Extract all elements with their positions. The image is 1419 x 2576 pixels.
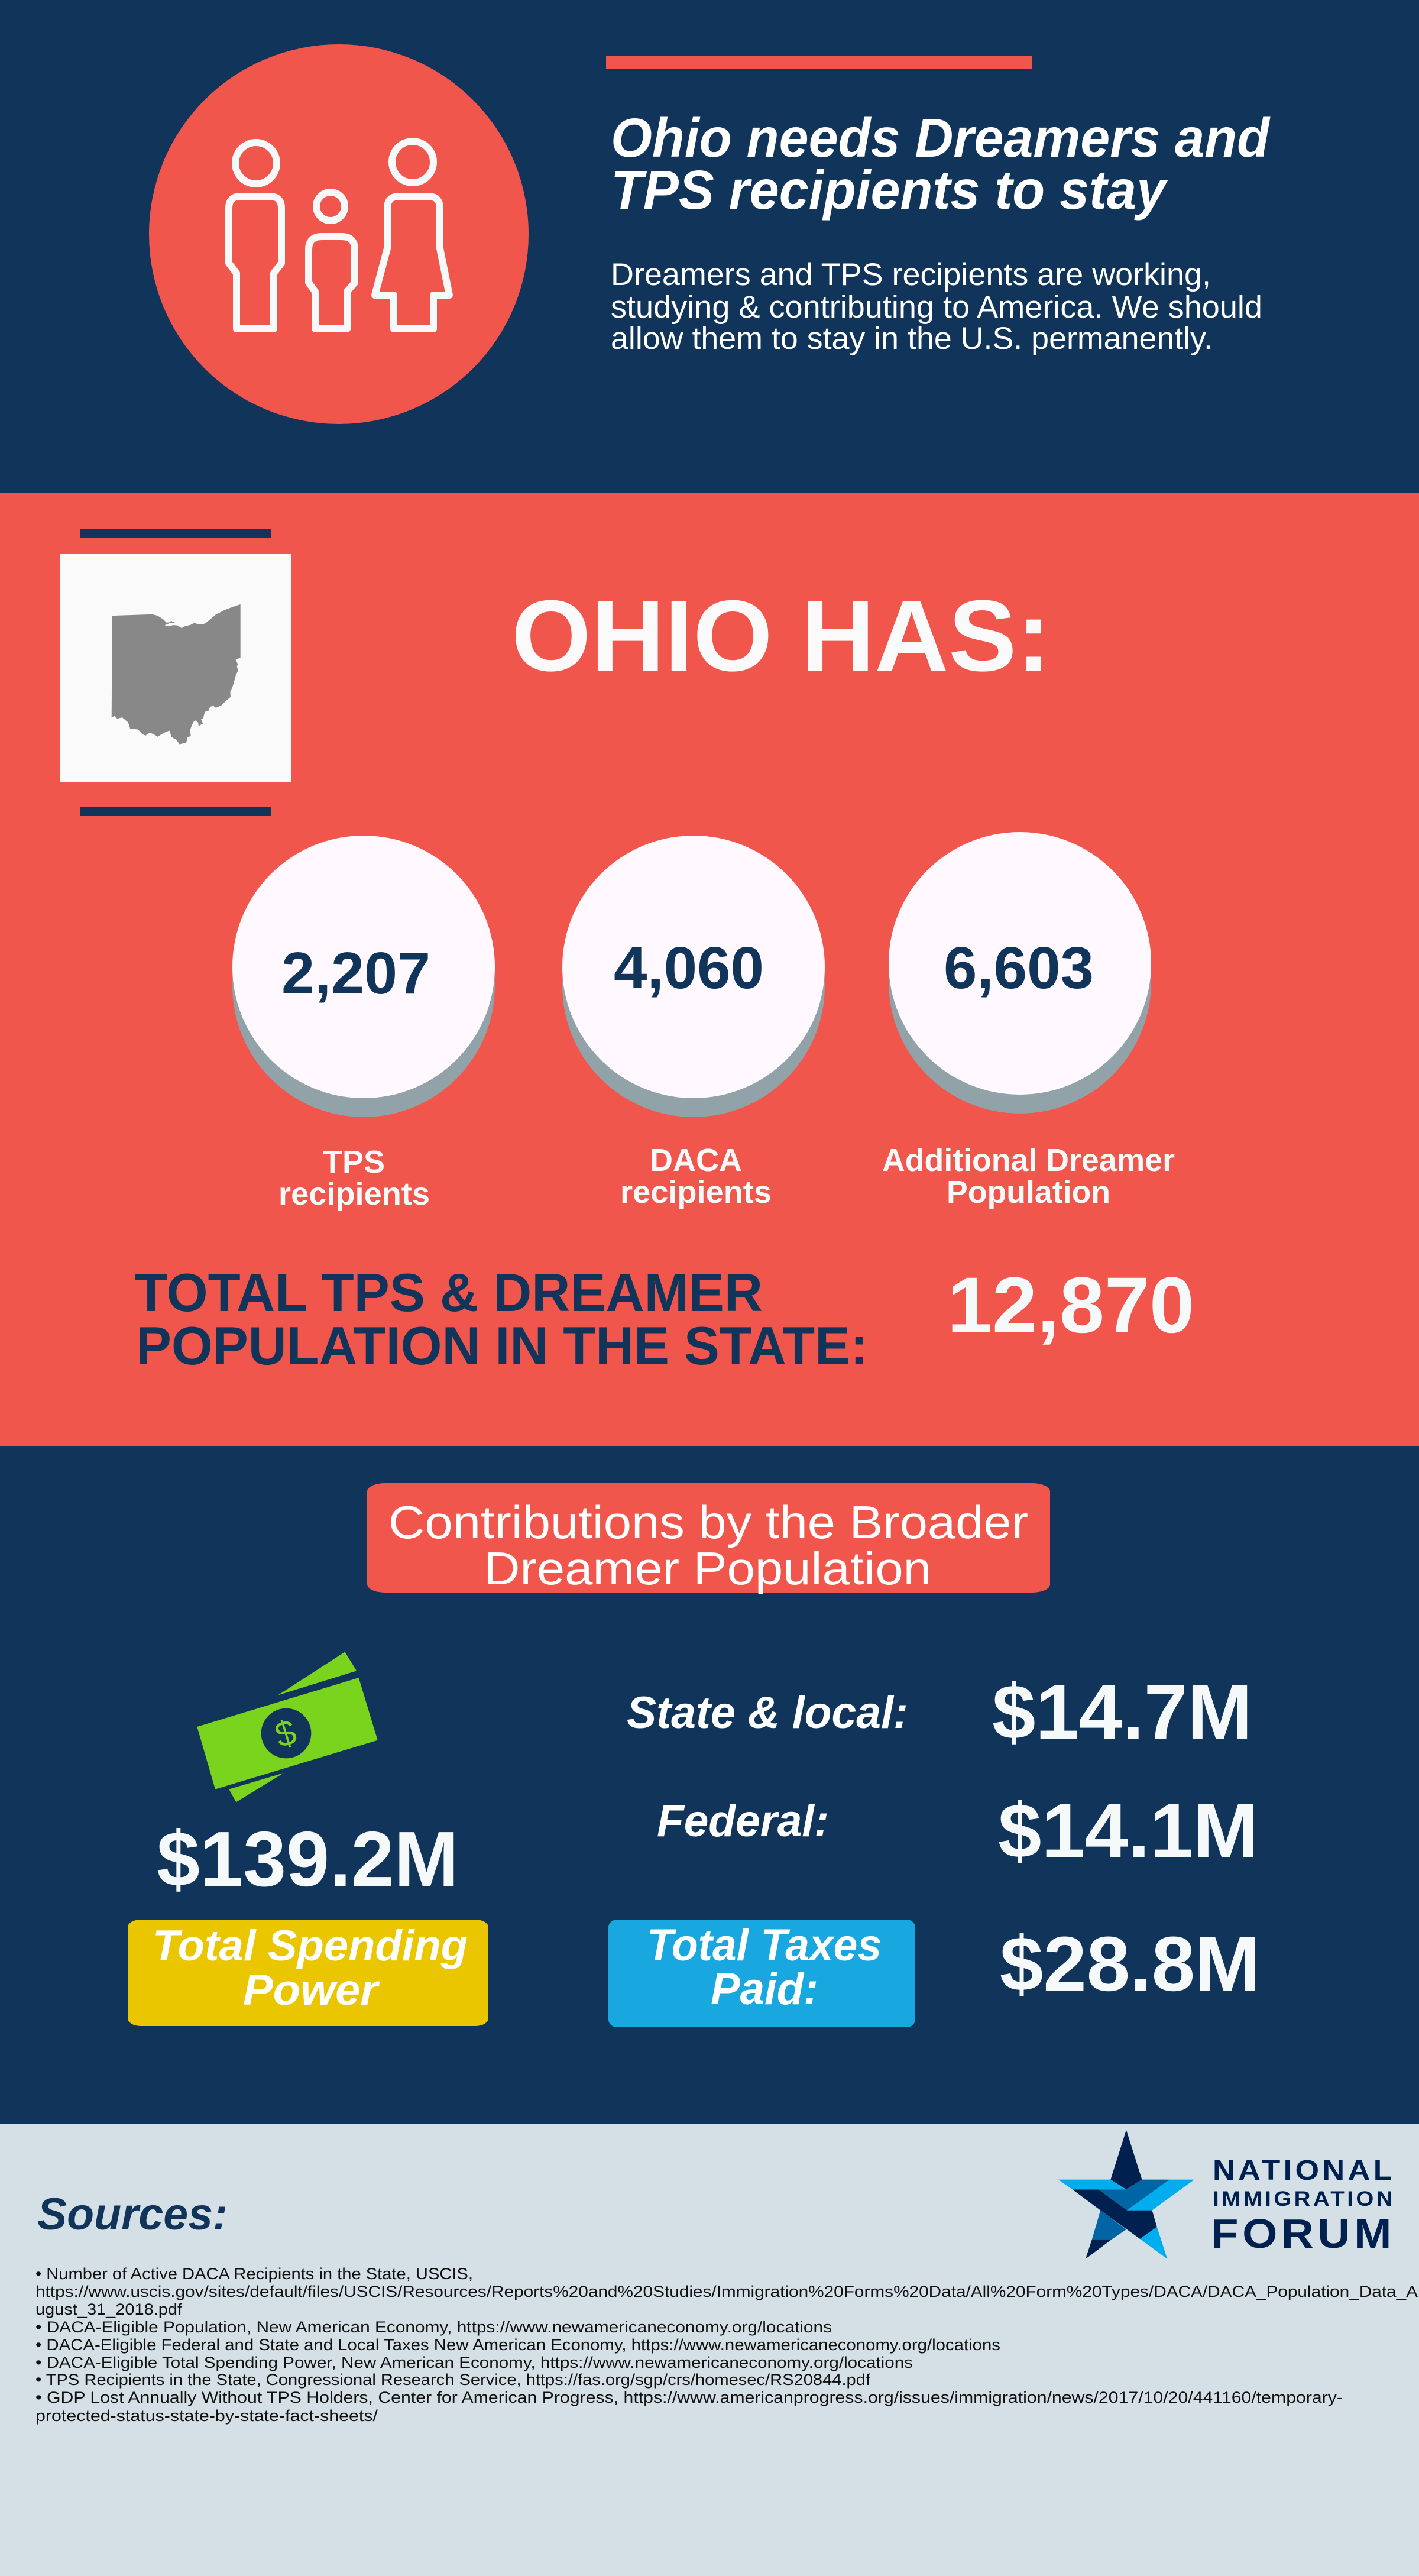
- stat: DACA recipients: [562, 836, 825, 1210]
- logo: National Immigration Forum: IMMIGRATION: [1213, 2187, 1395, 2211]
- total label: POPULATION IN THE STATE:: [136, 1316, 868, 1376]
- total label: [135, 1263, 868, 1376]
- stat: additional Dreamer population: 6,603: [944, 935, 1094, 1001]
- stat: TPS recipients: 2,207: [281, 940, 430, 1007]
- row: state and local taxes: State & local:: [627, 1688, 908, 1738]
- label: total taxes paid: Total Taxes: [647, 1920, 882, 1970]
- source list: • DACA-Eligible Federal and State and Local Taxes New American Economy, https://www.newamericaneconomy.org/locations: [35, 2336, 1000, 2354]
- label: total spending power: [128, 1920, 488, 2026]
- icon: Ohio map: [60, 554, 291, 782]
- row: federal taxes: Federal:: [657, 1796, 829, 1846]
- title: [611, 107, 1271, 221]
- panel: contributions: [0, 1446, 1419, 2124]
- source list: • DACA-Eligible Population, New American Economy, https://www.newamericaneconomy.org/locations: [35, 2318, 832, 2336]
- stat: additional Dreamer population: Population: [947, 1174, 1110, 1210]
- stat: total spending: $139.2M: [157, 1816, 459, 1902]
- stat: additional Dreamer population: [882, 832, 1175, 1210]
- heading: contributions: Dreamer Population: [484, 1542, 931, 1594]
- stat: DACA recipients: recipients: [620, 1174, 772, 1210]
- stat: additional Dreamer population: Additional Dreamer: [882, 1143, 1175, 1178]
- stat: DACA recipients: 4,060: [614, 935, 764, 1001]
- logo: National Immigration Forum: FORUM: [1211, 2211, 1395, 2257]
- intro text: Dreamers and TPS recipients are working,: [611, 257, 1211, 292]
- title: Ohio needs Dreamers and: [611, 107, 1271, 169]
- heading: contributions: [367, 1483, 1050, 1594]
- stat: total taxes: $28.8M: [1000, 1920, 1260, 2007]
- stat: TPS recipients: recipients: [278, 1176, 430, 1212]
- panel: sources: [0, 2124, 1419, 2576]
- accent bar: [606, 56, 1032, 69]
- decorative bar above map: [80, 529, 271, 538]
- heading: sources: Sources:: [37, 2189, 228, 2240]
- label: total taxes paid: [608, 1920, 915, 2027]
- intro text: allow them to stay in the U.S. permanently.: [611, 321, 1213, 356]
- stat: TPS recipients: TPS: [323, 1144, 385, 1180]
- row: state and local taxes: [627, 1668, 1252, 1755]
- total label: TOTAL TPS & DREAMER: [135, 1263, 763, 1323]
- panel: Ohio has: [0, 493, 1419, 1446]
- panel: header: [0, 0, 1419, 493]
- intro text: [611, 257, 1262, 356]
- row: state and local taxes: $14.7M: [992, 1668, 1252, 1755]
- label: total taxes paid: Paid:: [711, 1964, 818, 2014]
- icon: money: [197, 1652, 378, 1802]
- heading: Ohio has: OHIO HAS:: [511, 580, 1051, 692]
- icon: family in coral circle: [149, 44, 529, 424]
- title: TPS recipients to stay: [611, 159, 1168, 221]
- label: total spending power: Total Spending: [153, 1922, 468, 1970]
- logo: National Immigration Forum: NATIONAL: [1213, 2155, 1395, 2186]
- row: federal taxes: $14.1M: [998, 1787, 1258, 1874]
- icon: money: $: [270, 1712, 301, 1755]
- decorative bar below map: [80, 807, 271, 816]
- source list: ugust_31_2018.pdf: [35, 2300, 183, 2318]
- source list: protected-status-state-by-state-fact-sheets/: [35, 2407, 378, 2425]
- logo: National Immigration Forum: [1058, 2130, 1395, 2259]
- source list: • GDP Lost Annually Without TPS Holders, Center for American Progress, https://www.americanprogress.org/issues/immigration/news/2017/10/20/441160/temporary-: [35, 2389, 1343, 2406]
- source list: • DACA-Eligible Total Spending Power, New American Economy, https://www.newamericaneconomy.org/locations: [35, 2354, 913, 2371]
- total number: 12,870: [947, 1261, 1194, 1350]
- source list: • Number of Active DACA Recipients in the State, USCIS,: [35, 2265, 473, 2283]
- source list: • TPS Recipients in the State, Congressional Research Service, https://fas.org/sgp/crs/homesec/RS20844.pdf: [35, 2371, 871, 2389]
- heading: contributions: Contributions by the Broader: [388, 1496, 1028, 1548]
- stat: DACA recipients: DACA: [650, 1143, 742, 1178]
- source list: https://www.uscis.gov/sites/default/files/USCIS/Resources/Reports%20and%20Studies/Immigration%20Forms%20Data/All%20Form%20Types/DACA/DACA_Population_Data_A: [35, 2283, 1418, 2300]
- intro text: studying & contributing to America. We should: [611, 290, 1262, 325]
- source list: [35, 2265, 1418, 2425]
- label: total spending power: Power: [243, 1966, 380, 2014]
- stat: TPS recipients: [232, 836, 495, 1212]
- row: federal taxes: [657, 1787, 1258, 1874]
